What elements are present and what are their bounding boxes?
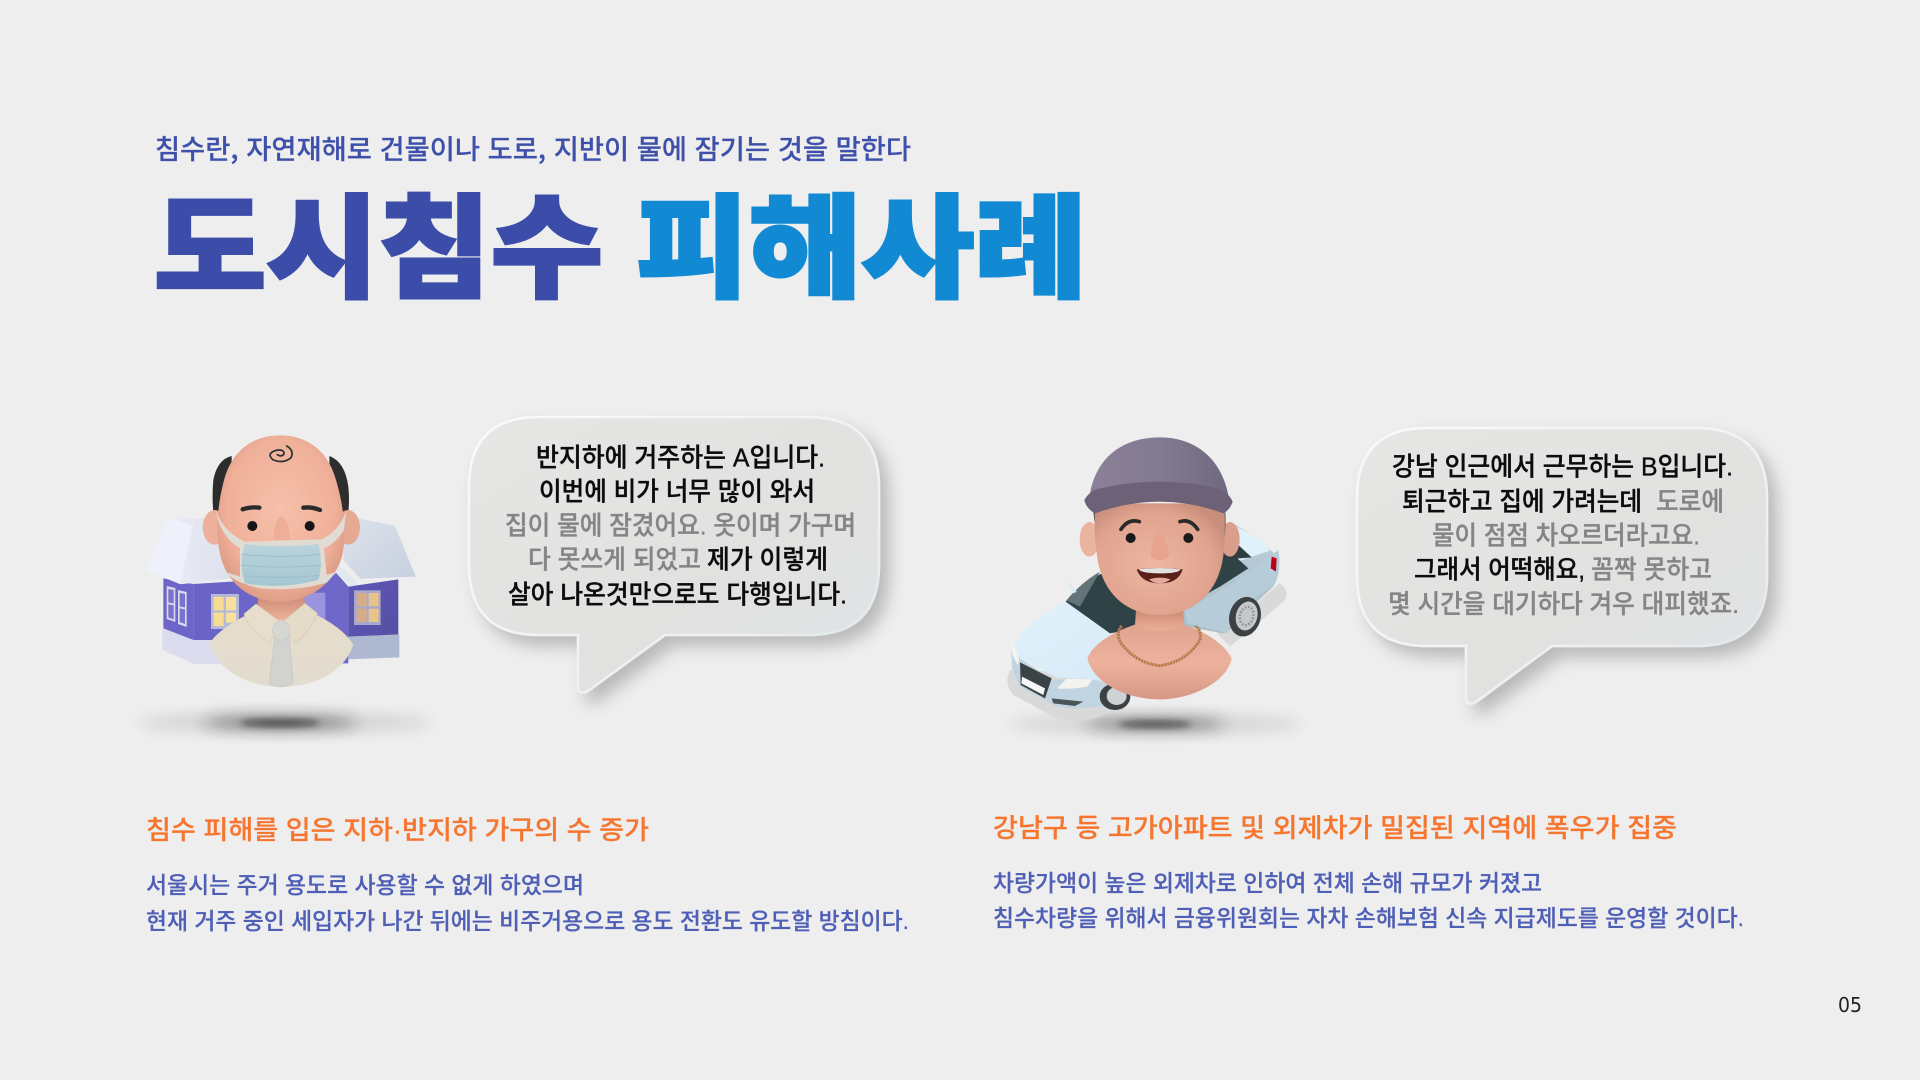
bubble shape (469, 417, 879, 693)
title (154, 187, 1087, 312)
left heading: 침수 피해를 입은 지하·반지하 가구의 수 증가 (146, 815, 649, 845)
head (1095, 503, 1225, 615)
smile (1137, 568, 1183, 583)
icon: car (1007, 523, 1287, 721)
cap (1084, 437, 1233, 513)
bubble text: 살아 나온것만으로도 다행입니다. (508, 580, 847, 610)
nose (1151, 529, 1169, 560)
bubble text: 그래서 어떡해요, (1414, 554, 1585, 584)
right body (993, 870, 1744, 931)
eyes (247, 521, 315, 531)
right body: 침수차량을 위해서 금융위원회는 자차 손해보험 신속 지급제도를 운영할 것이다. (993, 905, 1744, 931)
bubble text (1388, 452, 1739, 619)
bubble text: 몇 시간을 대기하다 겨우 대피했죠. (1388, 589, 1739, 619)
icon: house (147, 515, 416, 663)
bubble text: 도로에 (1656, 486, 1724, 516)
speech bubble A (469, 417, 879, 693)
text block: right case (993, 813, 1744, 931)
face mask (216, 512, 346, 589)
avatar B: man with cap in front of car (1007, 437, 1302, 732)
bubble text: 강남 인근에서 근무하는 B입니다. (1392, 452, 1733, 482)
bubble text: 제가 이렇게 (707, 544, 828, 574)
subtitle: 침수란, 자연재해로 건물이나 도로, 지반이 물에 잠기는 것을 말한다 (155, 128, 911, 167)
bubble text: 반지하에 거주하는 A입니다. (536, 442, 825, 472)
bubble text: 다 못쓰게 되었고 (528, 544, 701, 574)
left body (146, 872, 909, 934)
eyes (1126, 533, 1193, 543)
right body: 차량가액이 높은 외제차로 인하여 전체 손해 규모가 커졌고 (993, 870, 1542, 896)
bubble text: 집이 물에 잠겼어요. 옷이며 가구며 (505, 510, 856, 540)
bubble text (505, 442, 856, 610)
title: 피해사례 (636, 187, 1087, 312)
avatar A: man with mask in front of house (138, 435, 432, 731)
right heading: 강남구 등 고가아파트 및 외제차가 밀집된 지역에 폭우가 집중 (993, 813, 1677, 843)
neck and chest (1087, 607, 1232, 699)
shirt (209, 595, 353, 687)
left body: 현재 거주 중인 세입자가 나간 뒤에는 비주거용으로 용도 전환도 유도할 방침이다. (146, 908, 909, 934)
speech bubble B (1357, 428, 1767, 704)
hair curl (270, 446, 292, 461)
eyebrows (1121, 521, 1198, 529)
bubble text: 꼼짝 못하고 (1591, 554, 1712, 584)
floor shadow (1008, 716, 1302, 732)
left body: 서울시는 주거 용도로 사용할 수 없게 하였으며 (146, 872, 584, 898)
ears and hair (203, 456, 360, 545)
title: 도시침수 (154, 187, 603, 312)
head (217, 435, 344, 602)
text block: left case (146, 815, 909, 934)
ears and hair (1080, 508, 1240, 557)
bubble text: 이번에 비가 너무 많이 와서 (539, 476, 815, 506)
bubble text: 퇴근하고 집에 가려는데 (1402, 486, 1642, 516)
gold chain (1118, 626, 1200, 666)
nose (273, 516, 290, 540)
page number: 05 (1838, 993, 1862, 1017)
eyebrows (243, 507, 320, 510)
floor shadow (138, 714, 432, 731)
bubble shape (1357, 428, 1767, 704)
bubble text: 물이 점점 차오르더라고요. (1432, 520, 1700, 550)
